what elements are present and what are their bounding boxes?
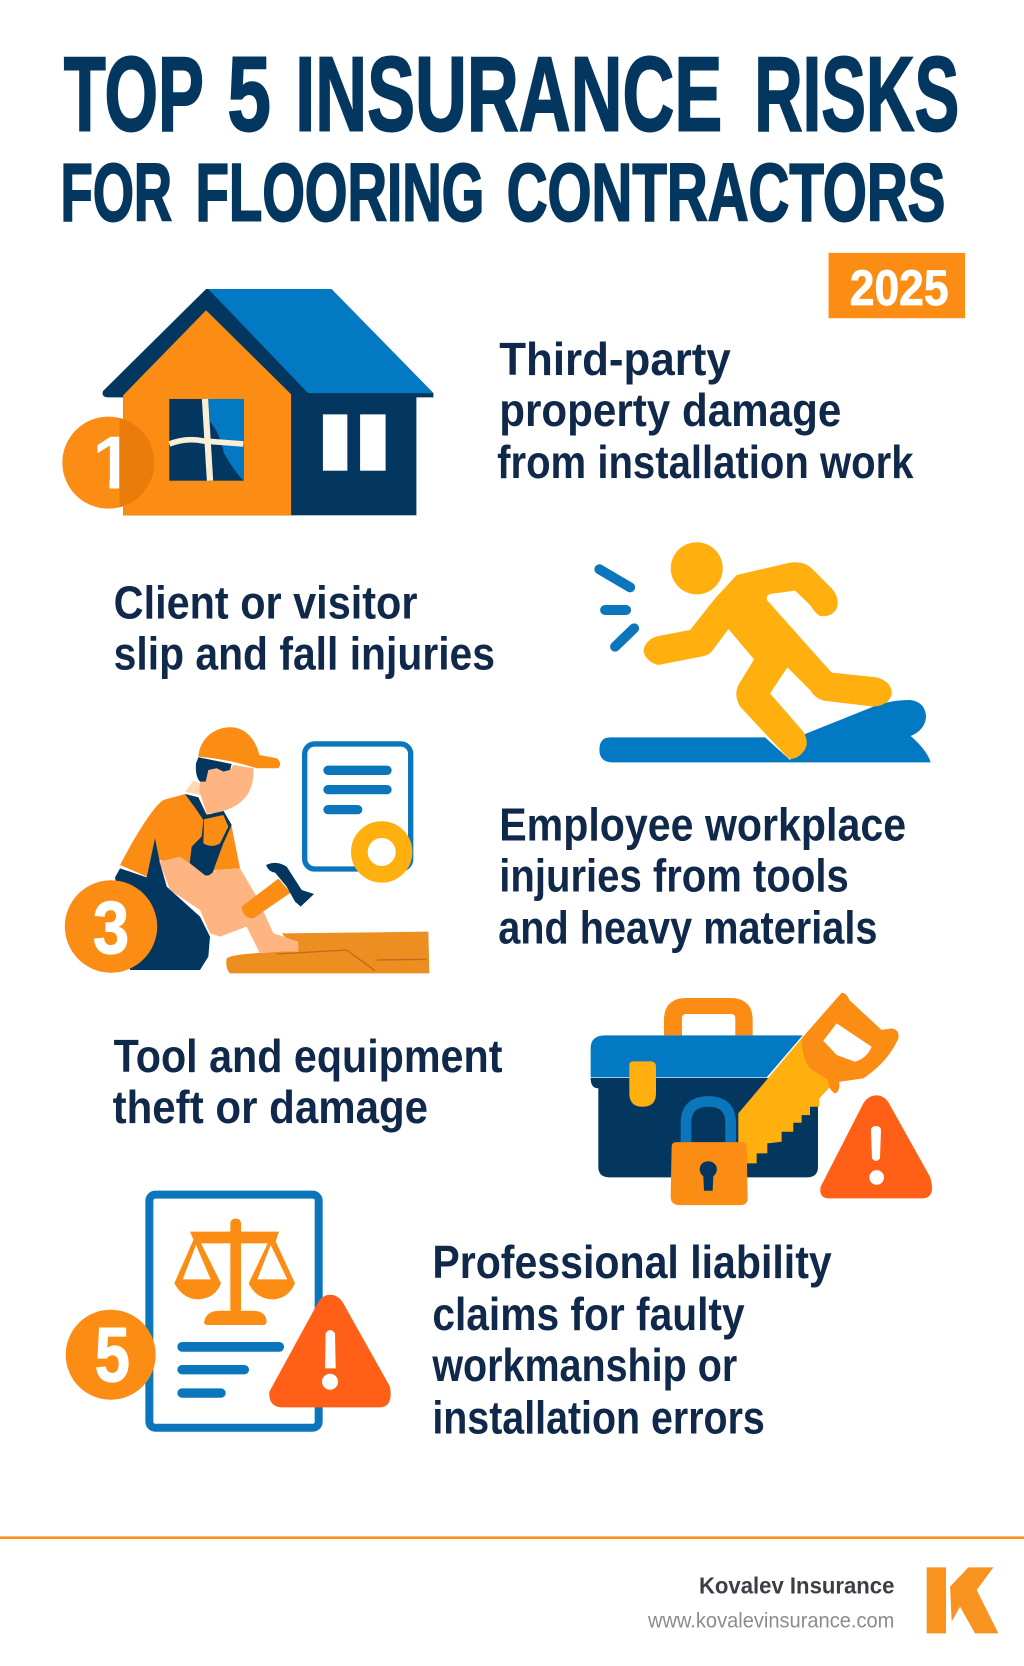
logo: K mark — [927, 1567, 998, 1633]
title: TOP — [64, 35, 204, 154]
text: risk 3: Employee workplace — [499, 798, 906, 850]
footer company name and URL: www.kovalevinsurance.com — [647, 1609, 894, 1633]
title — [61, 35, 959, 238]
text: risk 3: injuries from tools — [499, 849, 849, 901]
year badge: 2025 — [850, 260, 949, 316]
footer company name and URL: Kovalev Insurance — [699, 1573, 894, 1599]
text: risk 4: theft or damage — [113, 1081, 428, 1133]
panel: risk 3 icon, worker with hammer — [115, 727, 429, 973]
text: risk 5: workmanship or — [431, 1339, 737, 1391]
panel: risk 1 icon, house — [62, 289, 433, 515]
footer company name and URL — [647, 1573, 894, 1633]
panel: risk 1 icon, house: 1 — [92, 420, 134, 504]
text: risk 1: property damage — [499, 384, 841, 436]
title: 5 — [227, 35, 271, 154]
number badge 3: 3 — [93, 886, 129, 969]
text: risk 5 — [431, 1236, 832, 1443]
text: risk 5: claims for faulty — [432, 1288, 745, 1340]
panel: risk 4 icon, toolbox, saw and warning — [591, 993, 932, 1205]
year badge — [829, 253, 965, 318]
number badge 5 — [66, 1310, 156, 1400]
text: risk 3: and heavy materials — [498, 901, 877, 954]
text: risk 1: Third-party — [499, 333, 731, 385]
text: risk 5: Professional liability — [432, 1236, 832, 1288]
panel: risk 2 icon, slipping figure — [599, 542, 931, 762]
text: risk 4 — [113, 1030, 502, 1133]
text: risk 3 — [498, 798, 906, 954]
text: risk 2: Client or visitor — [114, 576, 417, 628]
text: risk 1 — [497, 333, 914, 488]
title: FLOORING — [195, 147, 484, 238]
number badge 5: 5 — [95, 1313, 130, 1398]
text: risk 5: installation errors — [432, 1391, 765, 1443]
title: INSURANCE — [295, 35, 722, 154]
panel: risk 5 icon, legal document and warning — [149, 1195, 391, 1428]
text: risk 2: slip and fall injuries — [114, 627, 495, 679]
title: FOR — [61, 147, 172, 238]
text: risk 2 — [114, 576, 495, 679]
text: risk 1: from installation work — [497, 436, 914, 488]
text: risk 4: Tool and equipment — [114, 1030, 502, 1082]
number badge 3 — [65, 880, 157, 973]
